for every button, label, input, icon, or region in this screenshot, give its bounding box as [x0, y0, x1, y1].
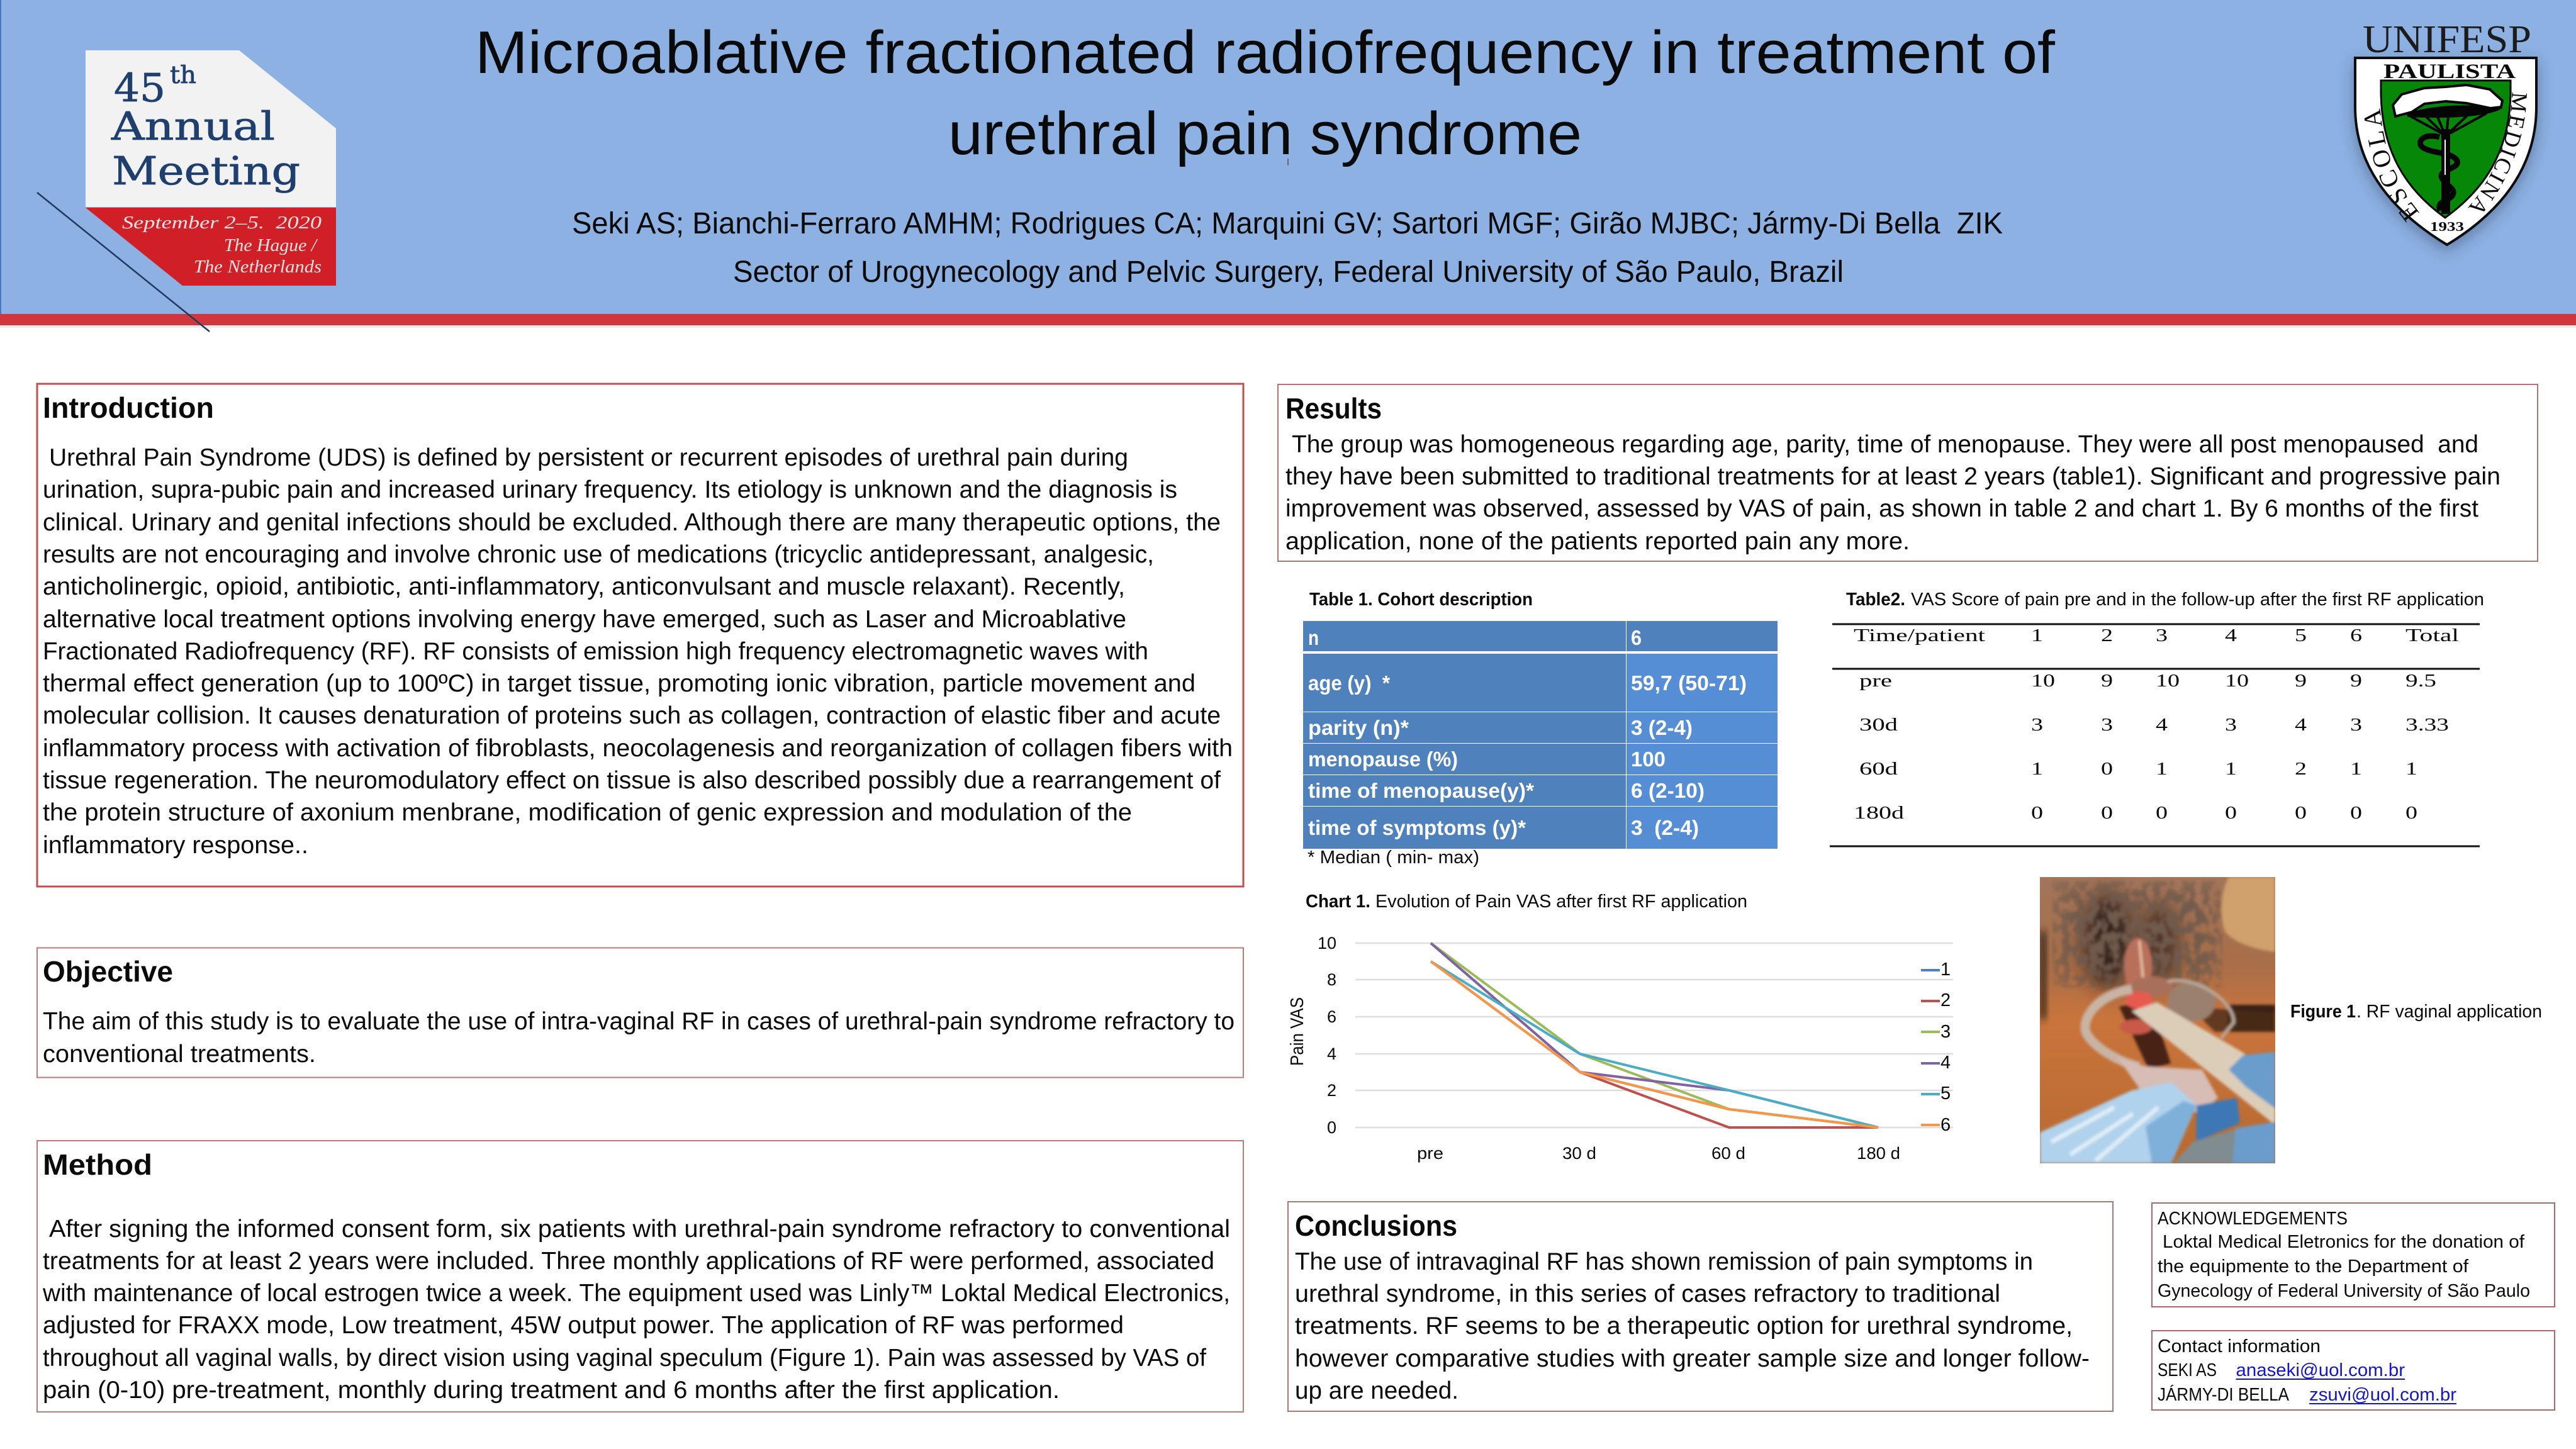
panel: contact information: JÁRMY-DI BELLA — [2158, 1384, 2290, 1405]
table 2: VAS score of pain: 10 — [2225, 671, 2249, 691]
table 2: VAS score of pain: 9 — [2295, 671, 2307, 691]
table 2: VAS score of pain: 30d — [1859, 715, 1898, 735]
table 2: VAS score of pain: VAS Score of pain pre and in the follow-up after the first RF application — [1911, 590, 2484, 610]
table 1: cohort description: 3 (2-4) — [1631, 816, 1699, 839]
panel: conclusions: however comparative studies with greater sample size and longer follow- — [1295, 1345, 2090, 1372]
table 2: VAS score of pain — [1830, 590, 2484, 846]
panel: conclusions: Conclusions — [1295, 1209, 1457, 1242]
table 1: cohort description: time of symptoms (y)* — [1308, 816, 1526, 839]
panel: acknowledgements — [2152, 1203, 2555, 1307]
table 2: VAS score of pain: 5 — [2295, 625, 2307, 646]
panel: introduction: clinical. Urinary and genital infections should be excluded. Although there are many therapeutic options, the — [43, 509, 1221, 536]
chart 1: evolution of pain VAS: pre — [1417, 1144, 1443, 1163]
university crest — [2346, 18, 2546, 256]
panel: introduction: inflammatory response.. — [43, 832, 308, 859]
table 2: VAS score of pain: 0 — [2156, 803, 2168, 823]
table 2: VAS score of pain: 0 — [2031, 803, 2043, 823]
chart 1: evolution of pain VAS: Pain VAS — [1287, 997, 1308, 1066]
figure caption: . RF vaginal application — [2356, 1002, 2542, 1022]
panel: introduction: Urethral Pain Syndrome (UDS) is defined by persistent or recurrent episodes of urethral pain during — [49, 444, 1128, 471]
table 2: VAS score of pain: 3 — [2031, 715, 2043, 735]
chart legend: 6 — [1940, 1115, 1951, 1135]
authors and affiliation — [572, 207, 2003, 289]
conference logo: Annual — [111, 103, 275, 149]
table 2: VAS score of pain: Time/patient — [1854, 625, 1985, 646]
panel: method: pain (0-10) pre-treatment, monthly during treatment and 6 months after the first application. — [43, 1377, 1060, 1404]
table 1: cohort description: time of menopause(y)* — [1308, 779, 1534, 802]
table 2: VAS score of pain: 10 — [2156, 671, 2180, 691]
panel: method: treatments for at least 2 years were included. Three monthly applications of RF were performed, associated — [43, 1248, 1214, 1275]
table 1: cohort description: 59,7 (50-71) — [1631, 671, 1747, 695]
table 1: cohort description: 6 — [1631, 626, 1642, 649]
table 2: VAS score of pain: 0 — [2405, 803, 2417, 823]
panel: method — [37, 1141, 1243, 1412]
table 2: VAS score of pain: 6 — [2350, 625, 2362, 646]
table 1: cohort description: 3 (2-4) — [1631, 716, 1693, 739]
conference logo: Meeting — [112, 148, 300, 194]
table 2: VAS score of pain: 1 — [2031, 625, 2043, 646]
panel: method: After signing the informed consent form, six patients with urethral-pain syndrome refractory to conventional — [49, 1216, 1230, 1243]
chart 1: evolution of pain VAS: 6 — [1327, 1007, 1336, 1026]
table 2: VAS score of pain: 9 — [2350, 671, 2362, 691]
authors and affiliation: Seki AS; Bianchi-Ferraro AMHM; Rodrigues CA; Marquini GV; Sartori MGF; Girão MJBC; Jármy-Di Bella ZIK — [572, 207, 2003, 240]
table 1: cohort description: parity (n)* — [1308, 716, 1409, 739]
university crest: UNIFESP — [2363, 18, 2531, 61]
panel: results: improvement was observed, assessed by VAS of pain, as shown in table 2 and chart 1. By 6 months of the first — [1285, 495, 2478, 522]
table 2: VAS score of pain: 1 — [2225, 759, 2237, 779]
panel: contact information: anaseki@uol.com.br — [2236, 1360, 2405, 1380]
panel: contact information: zsuvi@uol.com.br — [2309, 1385, 2456, 1405]
table 2: VAS score of pain: 1 — [2156, 759, 2168, 779]
table 2: VAS score of pain: 0 — [2350, 803, 2362, 823]
table 2: VAS score of pain: Total — [2405, 625, 2459, 646]
chart 1: evolution of pain VAS: 10 — [1318, 934, 1336, 953]
figure caption: Figure 1 — [2290, 1002, 2356, 1022]
table 1: cohort description: Table 1. Cohort description — [1309, 590, 1533, 610]
header band — [0, 0, 2576, 328]
panel: introduction: tissue regeneration. The neuromodulatory effect on tissue is also described possibly due a rearrangement of — [43, 767, 1221, 794]
chart legend: 1 — [1940, 959, 1951, 980]
table 1: cohort description: menopause (%) — [1308, 747, 1458, 771]
panel: results: application, none of the patients reported pain any more. — [1285, 528, 1910, 555]
conference logo: th — [170, 61, 196, 89]
panel: introduction: anticholinergic, opioid, antibiotic, anti-inflammatory, anticonvulsant and muscle relaxant). Recently, — [43, 573, 1125, 600]
chart legend — [1921, 959, 1951, 1135]
table 2: VAS score of pain: 9.5 — [2405, 671, 2436, 691]
chart 1: evolution of pain VAS: 2 — [1327, 1081, 1336, 1100]
panel: introduction: urination, supra-pubic pain and increased urinary frequency. Its etiology is unknown and the diagnosis is — [43, 476, 1177, 503]
chart legend: 3 — [1940, 1022, 1951, 1042]
table 2: VAS score of pain: 9 — [2101, 671, 2113, 691]
table 1: cohort description: age (y) * — [1308, 671, 1390, 695]
panel: objective: conventional treatments. — [43, 1041, 316, 1068]
table 2: VAS score of pain: 2 — [2295, 759, 2307, 779]
panel: results: The group was homogeneous regarding age, parity, time of menopause. They were all post menopaused and — [1292, 431, 2478, 458]
table 2: VAS score of pain: 0 — [2101, 759, 2113, 779]
panel: results: they have been submitted to traditional treatments for at least 2 years (table1). Significant and progressive pain — [1285, 463, 2500, 490]
table 2: VAS score of pain: 1 — [2350, 759, 2362, 779]
title: Microablative fractionated radiofrequency in treatment of — [475, 19, 2055, 86]
conference logo: The Netherlands — [194, 257, 322, 277]
panel: introduction: the protein structure of axonium menbrane, modification of genic expression and modulation of the — [43, 799, 1132, 826]
table 2: VAS score of pain: 2 — [2101, 625, 2113, 646]
university crest: PAULISTA — [2383, 60, 2516, 83]
table 2: VAS score of pain: 3 — [2350, 715, 2362, 735]
conference logo: September 2–5. 2020 — [122, 213, 322, 233]
panel: contact information: SEKI AS — [2158, 1360, 2217, 1380]
table 2: VAS score of pain: 3 — [2156, 625, 2168, 646]
panel: objective: The aim of this study is to evaluate the use of intra-vaginal RF in cases of urethral-pain syndrome refractory to — [43, 1008, 1235, 1035]
table 2: VAS score of pain: 4 — [2225, 625, 2237, 646]
panel: conclusions: treatments. RF seems to be a therapeutic option for urethral syndrome, — [1295, 1312, 2073, 1340]
panel: objective: Objective — [43, 955, 173, 988]
table 2: VAS score of pain: 3 — [2101, 715, 2113, 735]
panel: introduction: molecular collision. It causes denaturation of proteins such as collagen, contraction of elastic fiber and acute — [43, 702, 1221, 729]
panel: conclusions — [1288, 1202, 2113, 1411]
chart legend: 5 — [1940, 1083, 1951, 1104]
university crest: ESCOLA — [2365, 108, 2419, 223]
table 1: cohort description: 6 (2-10) — [1631, 779, 1705, 802]
table 2: VAS score of pain: 1 — [2031, 759, 2043, 779]
conference logo: The Hague / — [224, 236, 318, 255]
table 1: cohort description: 100 — [1631, 747, 1666, 771]
panel: results — [1278, 384, 2538, 561]
conference logo — [37, 50, 336, 332]
chart 1: evolution of pain VAS: 60 d — [1711, 1144, 1745, 1163]
panel: acknowledgements: Loktal Medical Eletronics for the donation of — [2163, 1232, 2525, 1252]
chart legend: 2 — [1940, 990, 1951, 1010]
panel: introduction: results are not encouraging and involve chronic use of medications (tricyclic antidepressant, analgesic, — [43, 541, 1154, 568]
table 2: VAS score of pain: 4 — [2295, 715, 2307, 735]
panel: conclusions: urethral syndrome, in this series of cases refractory to traditional — [1295, 1280, 2000, 1307]
panel: contact information — [2152, 1331, 2555, 1410]
chart 1: evolution of pain VAS: 0 — [1327, 1118, 1336, 1137]
table 1: cohort description — [1303, 590, 1778, 868]
panel: introduction: inflammatory process with activation of fibroblasts, neocolagenesis and reorganization of collagen fibers with — [43, 735, 1233, 762]
chart legend: 4 — [1940, 1053, 1951, 1073]
panel: method: Method — [43, 1148, 152, 1181]
table 1: cohort description: n — [1308, 626, 1319, 649]
panel: introduction — [37, 384, 1243, 887]
chart 1: evolution of pain VAS: 180 d — [1857, 1144, 1900, 1163]
table 2: VAS score of pain: 1 — [2405, 759, 2417, 779]
table 2: VAS score of pain: 3 — [2225, 715, 2237, 735]
table 2: VAS score of pain: 60d — [1859, 759, 1898, 779]
table 2: VAS score of pain: 0 — [2295, 803, 2307, 823]
title — [475, 19, 2055, 167]
chart 1: evolution of pain VAS: Evolution of Pain VAS after first RF application — [1375, 892, 1747, 912]
university crest: MEDICINA — [2468, 92, 2527, 211]
authors and affiliation: Sector of Urogynecology and Pelvic Surgery, Federal University of São Paulo, Brazil — [733, 255, 1844, 289]
table 2: VAS score of pain: 0 — [2225, 803, 2237, 823]
chart 1: evolution of pain VAS: 8 — [1327, 970, 1336, 989]
table 1: cohort description: * Median ( min- max) — [1308, 848, 1479, 868]
panel: objective — [37, 948, 1243, 1077]
university crest: 1933 — [2430, 219, 2464, 234]
table 2: VAS score of pain: 180d — [1854, 803, 1905, 823]
chart 1: evolution of pain VAS: Chart 1. — [1306, 892, 1370, 912]
panel: conclusions: The use of intravaginal RF has shown remission of pain symptoms in — [1295, 1248, 2033, 1275]
panel: method: adjusted for FRAXX mode, Low treatment, 45W output power. The application of RF was performed — [43, 1312, 1124, 1339]
panel: acknowledgements: the equipmente to the Department of — [2158, 1256, 2469, 1277]
panel: introduction: Introduction — [43, 391, 214, 424]
chart 1: evolution of pain VAS: 4 — [1327, 1044, 1336, 1063]
chart 1: evolution of pain VAS — [1287, 892, 1953, 1163]
panel: conclusions: up are needed. — [1295, 1377, 1459, 1404]
table 2: VAS score of pain: 3.33 — [2405, 715, 2449, 735]
table 2: VAS score of pain: pre — [1859, 671, 1892, 691]
panel: method: throughout all vaginal walls, by direct vision using vaginal speculum (Figure 1). Pain was assessed by VAS of — [43, 1345, 1206, 1372]
panel: acknowledgements: Gynecology of Federal University of São Paulo — [2158, 1281, 2530, 1301]
chart 1: evolution of pain VAS: 30 d — [1562, 1144, 1596, 1163]
table 2: VAS score of pain: 10 — [2031, 671, 2055, 691]
panel: introduction: alternative local treatment options involving energy have emerged, such as Laser and Microablative — [43, 606, 1126, 633]
title: urethral pain syndrome — [948, 100, 1582, 167]
panel: contact information: Contact information — [2158, 1336, 2321, 1357]
table 2: VAS score of pain: 4 — [2156, 715, 2168, 735]
panel: introduction: thermal effect generation (up to 100ºC) in target tissue, promoting ionic vibration, particle movement and — [43, 670, 1196, 697]
panel: method: with maintenance of local estrogen twice a week. The equipment used was Linly™ Loktal Medical Electronics, — [42, 1280, 1230, 1307]
figure 1: RF vaginal application photo — [2040, 877, 2275, 1163]
panel: results: Results — [1285, 392, 1382, 425]
table 2: VAS score of pain: Table2. — [1846, 590, 1905, 610]
panel: acknowledgements: ACKNOWLEDGEMENTS — [2158, 1209, 2348, 1229]
panel: introduction: Fractionated Radiofrequency (RF). RF consists of emission high frequency electromagnetic waves with — [43, 638, 1148, 665]
table 2: VAS score of pain: 0 — [2101, 803, 2113, 823]
conference logo: 45 — [114, 65, 165, 111]
